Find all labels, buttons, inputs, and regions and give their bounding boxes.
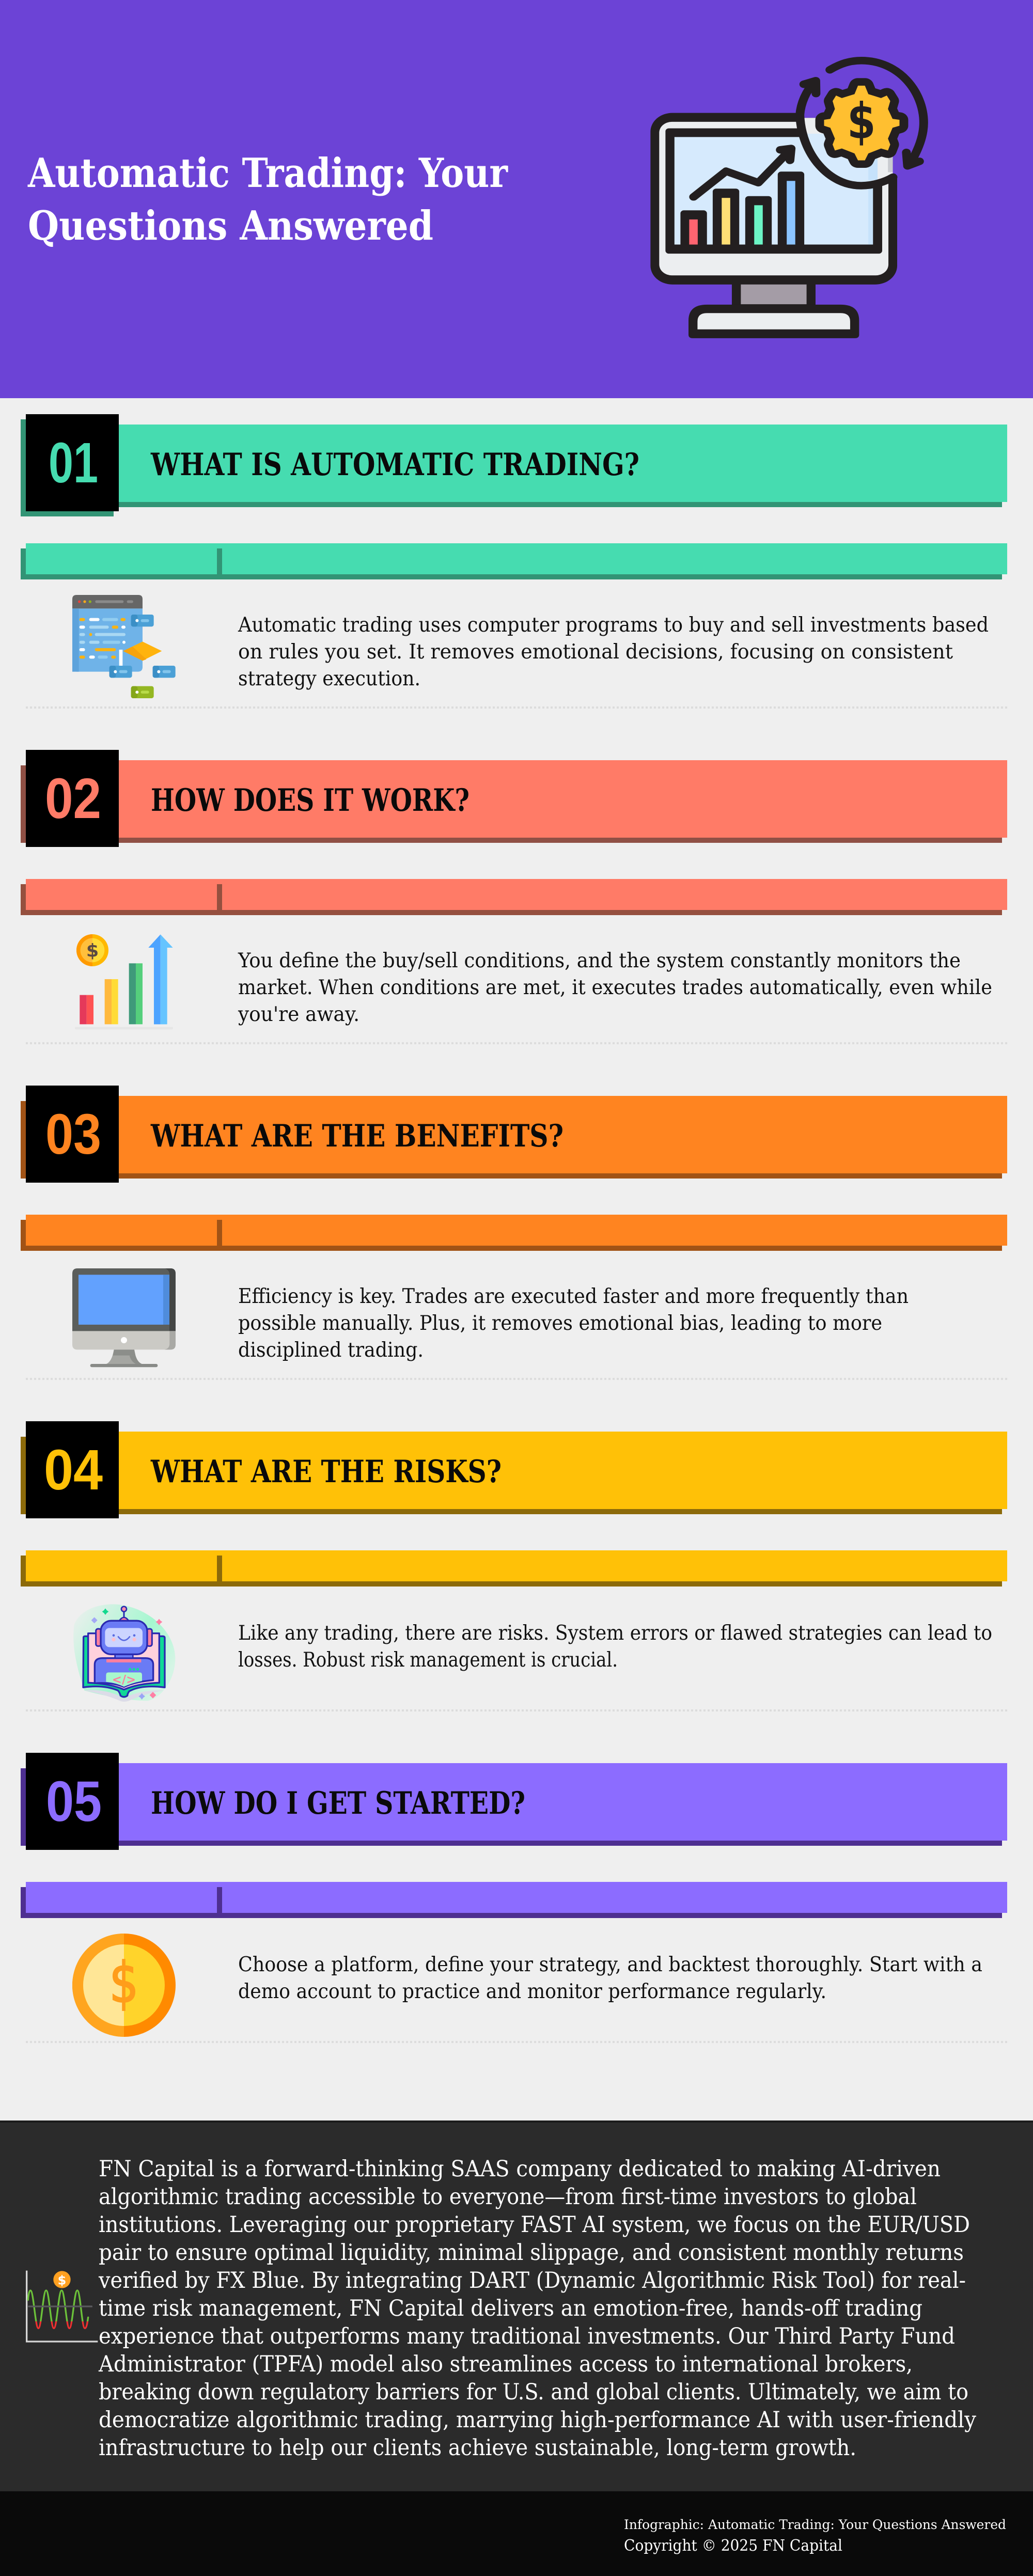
footer bbox=[0, 2491, 1033, 2576]
panel: section 2 bbox=[21, 750, 1007, 1043]
body text: you're away. bbox=[238, 1003, 359, 1026]
heading bar: WHAT IS AUTOMATIC TRADING? bbox=[150, 447, 639, 483]
body text: on rules you set. It removes emotional decisions, focusing on consistent bbox=[238, 640, 953, 664]
footer: Copyright © 2025 FN Capital bbox=[624, 2537, 842, 2555]
heading bar bbox=[21, 1753, 1007, 1850]
icon: gold dollar coin bbox=[72, 1934, 176, 2037]
body text: Choose a platform, define your strategy, and backtest thoroughly. Start with a bbox=[238, 1953, 982, 1976]
heading bar: 01 bbox=[49, 431, 98, 495]
title: Questions Answered bbox=[28, 202, 433, 249]
icon: wave chart with coin: $ bbox=[58, 2273, 66, 2287]
about text bbox=[98, 2156, 977, 2461]
heading bar: WHAT ARE THE RISKS? bbox=[150, 1454, 502, 1490]
body text bbox=[238, 1953, 982, 2003]
body text: losses. Robust risk management is crucial. bbox=[238, 1648, 618, 1672]
body text bbox=[238, 949, 992, 1026]
header banner bbox=[0, 0, 1033, 398]
heading bar bbox=[21, 414, 1007, 516]
body text bbox=[238, 1285, 909, 1362]
panel: section 4 bbox=[21, 1421, 1007, 1710]
about text: experience that outperforms many traditional investments. Our Third Party Fund bbox=[99, 2323, 955, 2349]
about text: institutions. Leveraging our proprietary FAST AI system, we focus on the EUR/USD bbox=[99, 2212, 970, 2238]
heading bar: WHAT ARE THE BENEFITS? bbox=[150, 1118, 564, 1154]
body text: disciplined trading. bbox=[238, 1339, 424, 1362]
about text: verified by FX Blue. By integrating DART (Dynamic Algorithmic Risk Tool) for real- bbox=[98, 2268, 966, 2294]
body text: market. When conditions are met, it executes trades automatically, even while bbox=[238, 976, 992, 999]
body text bbox=[238, 614, 989, 690]
icon: robot on open book: </> bbox=[112, 1673, 136, 1687]
about text: FN Capital is a forward-thinking SAAS company dedicated to making AI-driven bbox=[99, 2156, 941, 2182]
heading bar: 05 bbox=[46, 1770, 102, 1833]
body text: Automatic trading uses computer programs to buy and sell investments based bbox=[238, 614, 989, 637]
body text: demo account to practice and monitor performance regularly. bbox=[238, 1980, 826, 2003]
icon: code window and flowchart bbox=[72, 595, 176, 698]
icon: growth bars and coin: $ bbox=[86, 941, 99, 962]
heading bar bbox=[21, 1086, 1007, 1183]
panel: section 1 bbox=[21, 414, 1007, 708]
icon: monitor with chart and dollar gear: $ bbox=[847, 92, 876, 150]
panel: section 5 bbox=[21, 1753, 1007, 2042]
about text: Administrator (TPFA) model also streamlines access to international brokers, bbox=[98, 2351, 913, 2377]
title bbox=[27, 150, 508, 249]
heading bar bbox=[21, 1421, 1007, 1518]
body text: Efficiency is key. Trades are executed faster and more frequently than bbox=[238, 1285, 909, 1308]
tab row bbox=[21, 1550, 1007, 1587]
body text: You define the buy/sell conditions, and the system constantly monitors the bbox=[238, 949, 961, 972]
heading bar bbox=[21, 750, 1007, 847]
about text: infrastructure to help our clients achieve sustainable, long-term growth. bbox=[99, 2435, 856, 2461]
panel: section 3 bbox=[21, 1086, 1007, 1379]
body text bbox=[238, 1622, 992, 1672]
about text: breaking down regulatory barriers for U.S. and global clients. Ultimately, we aim to bbox=[99, 2379, 968, 2405]
icon: wave chart with coin bbox=[27, 2271, 98, 2342]
tab row bbox=[21, 879, 1007, 915]
panel: about FN Capital bbox=[0, 2121, 1033, 2491]
about text: democratize algorithmic trading, marrying high-performance AI with user-friendly bbox=[99, 2407, 977, 2433]
about text: algorithmic trading accessible to everyone—from first-time investors to global bbox=[99, 2184, 917, 2210]
about text: time risk management, FN Capital delivers an emotion-free, hands-off trading bbox=[99, 2296, 922, 2321]
body text: strategy execution. bbox=[238, 667, 420, 690]
body text: possible manually. Plus, it removes emotional bias, leading to more bbox=[238, 1312, 882, 1335]
footer: Infographic: Automatic Trading: Your Questions Answered bbox=[624, 2517, 1006, 2532]
title: Automatic Trading: Your bbox=[27, 150, 508, 197]
heading bar: 04 bbox=[44, 1438, 103, 1502]
tab row bbox=[21, 1215, 1007, 1251]
body text: Like any trading, there are risks. System errors or flawed strategies can lead to bbox=[238, 1622, 992, 1645]
icon: gold dollar coin: $ bbox=[109, 1951, 138, 2016]
heading bar: 03 bbox=[45, 1103, 101, 1166]
icon: robot on open book bbox=[73, 1604, 175, 1702]
heading bar: 02 bbox=[45, 767, 101, 830]
heading bar: HOW DO I GET STARTED? bbox=[151, 1785, 525, 1821]
icon: monitor with chart and dollar gear bbox=[650, 59, 924, 338]
icon: desktop monitor bbox=[72, 1268, 176, 1367]
tab row bbox=[21, 1882, 1007, 1918]
icon: growth bars and coin bbox=[75, 934, 173, 1029]
heading bar: HOW DOES IT WORK? bbox=[151, 782, 469, 819]
about text: pair to ensure optimal liquidity, minimal slippage, and consistent monthly returns bbox=[99, 2240, 964, 2266]
tab row bbox=[21, 543, 1007, 579]
